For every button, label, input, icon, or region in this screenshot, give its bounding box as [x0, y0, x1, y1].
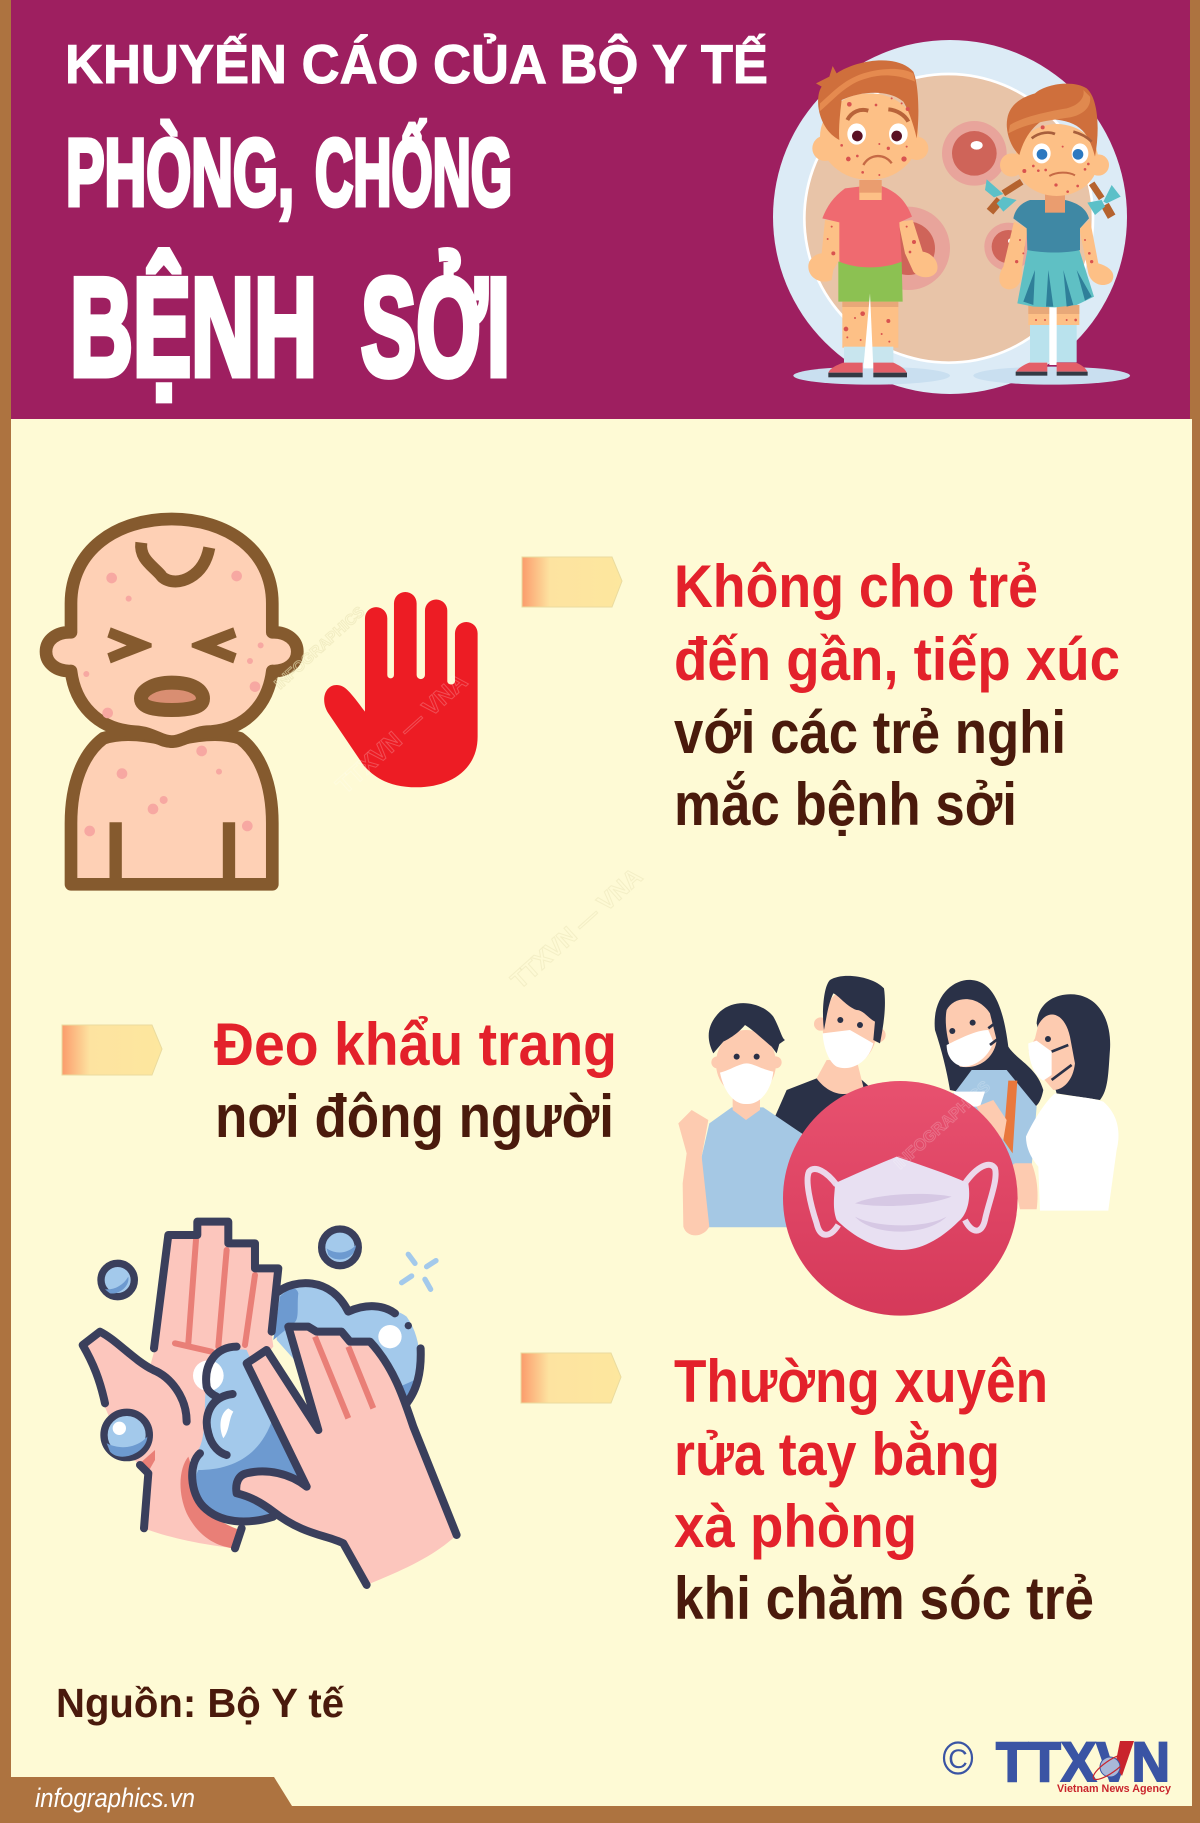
- text block: advice 3: rửa tay bằng: [674, 1421, 1000, 1488]
- watermark text: TTXVN — VNA: [506, 863, 648, 994]
- text block: advice 3: khi chăm sóc trẻ: [674, 1565, 1094, 1632]
- arm lines: [116, 822, 229, 880]
- surgical mask: [808, 1157, 996, 1250]
- squeezed eyes: [107, 627, 237, 663]
- icon: red stop hand: [324, 592, 478, 787]
- measles spots: [827, 97, 1093, 343]
- boy figure: [808, 60, 938, 377]
- forehead wrinkle: [141, 543, 209, 581]
- illustration: washing hands with soap: [83, 1222, 457, 1585]
- cream content panel: [11, 419, 1192, 1806]
- illustration: two children with measles: [773, 40, 1130, 394]
- text block: advice 1: với các trẻ nghi: [674, 699, 1066, 766]
- person 2: [775, 976, 886, 1137]
- text block: advice 1: Không cho trẻ: [674, 553, 1038, 620]
- text block: advice 1: mắc bệnh sởi: [674, 771, 1017, 838]
- header banner: [11, 0, 1190, 419]
- baby body: [71, 735, 272, 884]
- title line 2: PHÒNG,: [66, 120, 294, 226]
- watermark text: [271, 603, 994, 1173]
- wordmark: TTXVN: [996, 1730, 1170, 1793]
- illustration: people wearing masks: [678, 976, 1119, 1316]
- copyright sign: [944, 1742, 972, 1774]
- bubbles: [101, 1229, 358, 1458]
- bullet tag 3: [521, 1353, 621, 1403]
- illustration: crying baby with rash: [46, 519, 297, 884]
- front hand: [237, 1325, 457, 1585]
- title line 3: SỞI: [361, 249, 510, 405]
- girl figure: [985, 84, 1121, 376]
- logo: TTXVN copyright: [944, 1730, 1172, 1795]
- braids and ribbons: [1003, 182, 1102, 198]
- title line 2: CHỐNG: [315, 120, 512, 226]
- sparkle: [402, 1254, 436, 1289]
- text block: advice 2: nơi đông người: [215, 1083, 614, 1150]
- text block: advice 3: xà phòng: [674, 1493, 917, 1560]
- text block: advice 2: [214, 1011, 617, 1150]
- backdrop circle: [773, 40, 1127, 394]
- tagline: Vietnam News Agency: [1057, 1783, 1172, 1795]
- text block: advice 3: Thường xuyên: [674, 1348, 1048, 1415]
- text block: advice 2: Đeo khẩu trang: [214, 1011, 617, 1078]
- source note: Nguồn: Bộ Y tế: [56, 1680, 344, 1726]
- watermark text: INFOGRAPHICS: [891, 1078, 994, 1173]
- back hand: [83, 1222, 278, 1548]
- bullet tag 1: [522, 557, 622, 607]
- site name: infographics.vn: [35, 1783, 195, 1813]
- person 4: [1026, 994, 1119, 1211]
- V accent and globe: [1090, 1741, 1134, 1783]
- copyright sign: C: [948, 1744, 968, 1774]
- red circle: [783, 1081, 1018, 1316]
- skin lesion diagrams: [867, 121, 1032, 290]
- baby head: [46, 519, 297, 742]
- title line 1: KHUYẾN CÁO CỦA BỘ Y TẾ: [65, 33, 768, 95]
- soap foam: [277, 1284, 420, 1433]
- rash spots: [83, 571, 264, 836]
- person 1: [678, 1003, 802, 1235]
- text block: advice 1: [674, 553, 1120, 838]
- text block: advice 1: đến gần, tiếp xúc: [674, 626, 1120, 693]
- title line 3: BỆNH: [70, 250, 317, 405]
- person 3: [935, 980, 1043, 1209]
- mouth: [141, 683, 203, 710]
- hand outlines: [83, 1222, 457, 1585]
- text block: advice 3: [674, 1348, 1094, 1632]
- watermark text: INFOGRAPHICS: [271, 603, 368, 693]
- watermark text: TTXVN — VNA: [331, 668, 473, 799]
- footer tab: [0, 1777, 292, 1823]
- bullet tag 2: [62, 1025, 162, 1075]
